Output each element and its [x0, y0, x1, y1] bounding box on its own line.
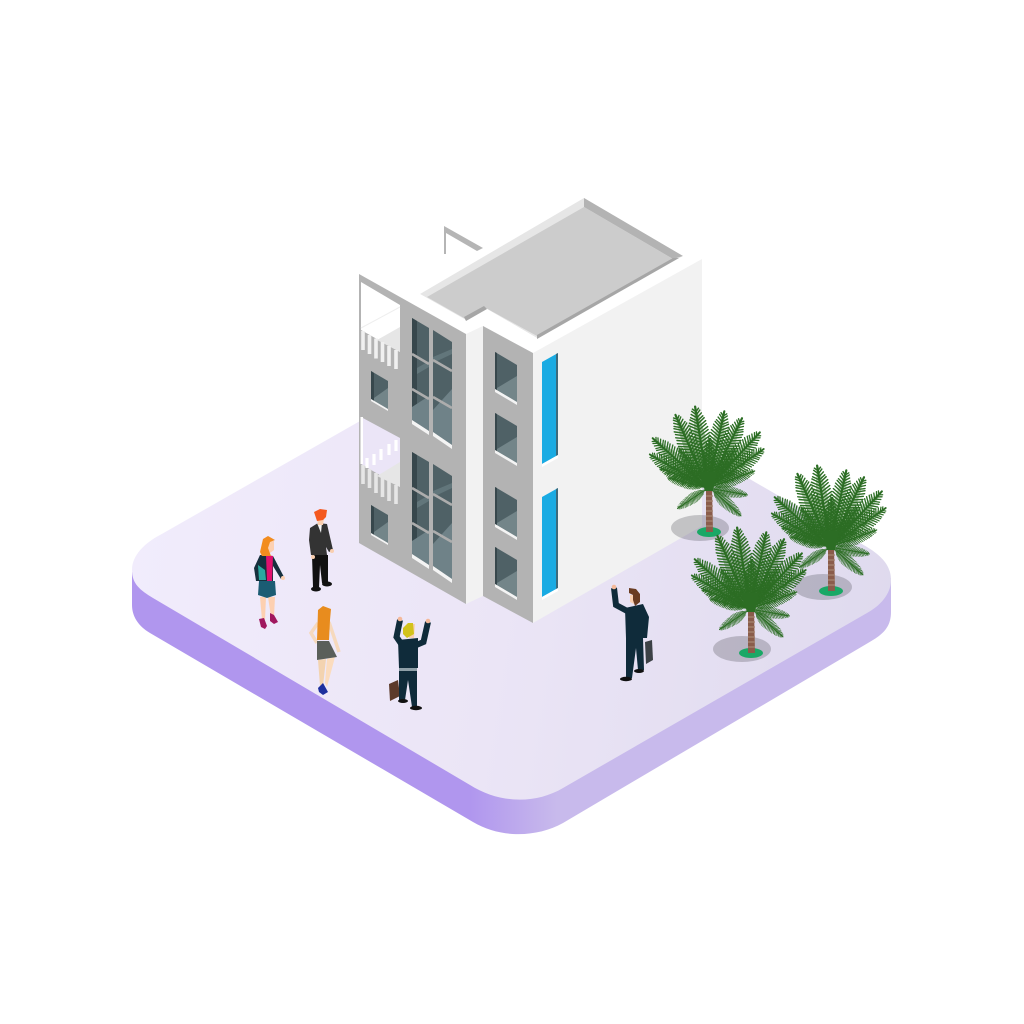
platform top surface	[132, 342, 891, 800]
recessed white strip	[466, 326, 483, 604]
person: man in black suit, red hair	[309, 509, 334, 592]
blue tall window upper	[542, 353, 558, 467]
front section windows	[495, 352, 517, 600]
person: woman seen from behind, grey skirt	[311, 606, 339, 695]
lower balcony	[360, 417, 400, 504]
roof notch shadow	[464, 306, 487, 321]
left face windows	[371, 318, 452, 583]
palm tree far right	[767, 464, 891, 600]
platform side edge	[132, 572, 891, 834]
front section grey face	[483, 326, 533, 623]
isometric platform	[132, 342, 891, 834]
palm tree back right	[645, 405, 769, 541]
right white wall	[533, 259, 702, 623]
roof deck	[427, 207, 673, 336]
person: blond man arms raised with briefcase	[389, 617, 430, 710]
building	[359, 198, 702, 623]
roof parapet shaded edge	[584, 198, 683, 259]
left grey face	[359, 274, 466, 604]
person: man waving with briefcase	[612, 585, 653, 681]
roof parapet	[420, 198, 683, 338]
white roof rim	[359, 256, 702, 353]
palm tree front	[687, 526, 811, 662]
back roof bracket	[444, 226, 483, 254]
roof white top	[359, 198, 702, 353]
blue tall window lower	[542, 488, 558, 600]
person: woman with teal bag	[254, 536, 285, 629]
upper balcony	[361, 282, 400, 369]
roof inner shadow	[537, 258, 679, 339]
